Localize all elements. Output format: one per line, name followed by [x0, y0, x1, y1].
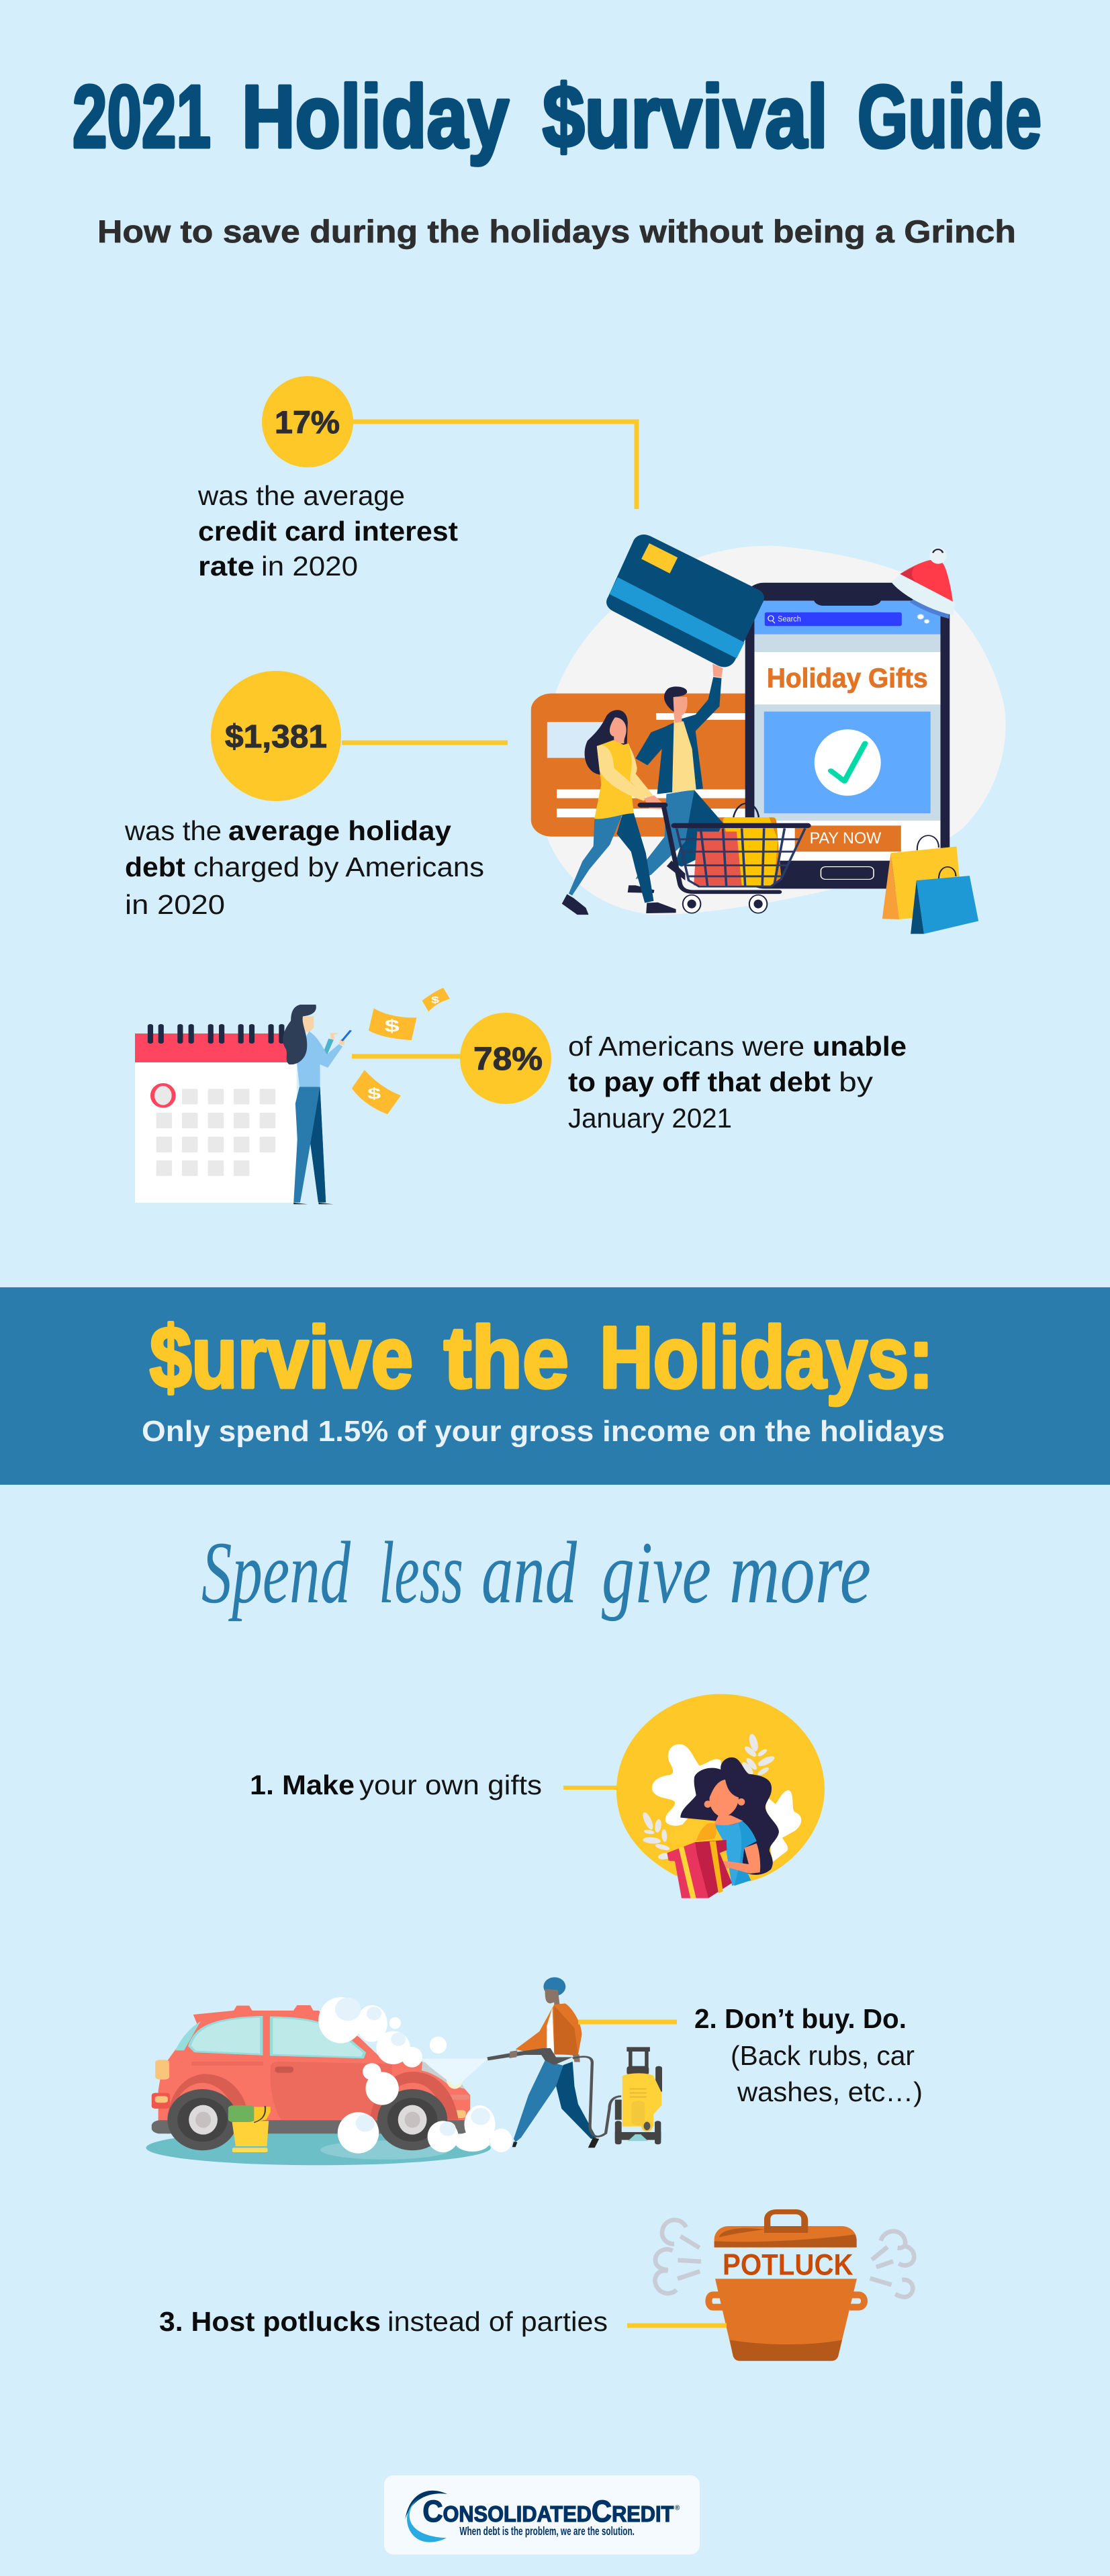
logo panel: [384, 2475, 700, 2555]
tip 1 text: your own gifts: [359, 1769, 542, 1800]
connector: calendar to 78%: [352, 1054, 463, 1058]
stat: 17% badge: [262, 376, 353, 467]
background blob: [537, 546, 1006, 915]
stat: $1,381 badge: [211, 671, 341, 801]
woman with phone: [283, 1005, 351, 1204]
phone: Search: [778, 614, 801, 623]
phone: PAY NOW: [810, 829, 881, 847]
pressure washer: [615, 2047, 662, 2144]
foam bubbles: [318, 1997, 512, 2154]
tip 3 text: instead of parties: [387, 2306, 608, 2337]
flying dollar bills: $: [367, 1086, 381, 1103]
subtitle: How to save during the holidays without being a Grinch: [97, 214, 1016, 249]
bucket: [228, 2105, 271, 2152]
face: [709, 1780, 739, 1817]
tip 2 text: washes, etc…): [737, 2076, 923, 2107]
logo swoosh: [405, 2491, 447, 2542]
stat: 78% badge: [460, 1013, 551, 1104]
banner heading: the: [444, 1308, 569, 1406]
connector: tip 1: [563, 1786, 618, 1790]
banner: survive the holidays: [0, 1287, 1110, 1485]
section heading: spend less and give more: less: [379, 1523, 463, 1622]
connector: tip 3: [627, 2324, 727, 2328]
title: Holiday: [242, 67, 509, 166]
section heading: spend less and give more: and: [481, 1523, 577, 1622]
hair: [680, 1757, 779, 1875]
calendar: [135, 1024, 297, 1203]
text: 78% unable to pay off debt: unable: [813, 1031, 907, 1062]
car: [152, 2005, 473, 2150]
text: credit card interest rate: in 2020: [261, 551, 358, 582]
flying dollar bills: $: [385, 1017, 400, 1036]
santa hat: [892, 547, 955, 618]
tip 2 text: (Back rubs, car: [731, 2040, 915, 2071]
banner heading: [150, 1308, 933, 1406]
text: credit card interest rate: was the average: [197, 480, 405, 511]
steam: [655, 2220, 914, 2297]
tip 1 text: [250, 1769, 542, 1800]
text: credit card interest rate: credit card interest: [198, 516, 458, 547]
tip 2 text: [694, 2003, 923, 2107]
banner heading: $urvive: [150, 1308, 413, 1406]
text: average holiday debt: debt: [125, 852, 185, 882]
woman: [562, 710, 676, 915]
stat: 78% badge: 78%: [473, 1042, 543, 1077]
leaves: [641, 1733, 776, 1860]
shopping cart: [641, 803, 808, 913]
gift box: [667, 1821, 732, 1898]
man with pressure washer: [487, 1977, 621, 2148]
text: 78% unable to pay off debt: by: [839, 1066, 874, 1097]
illustration: calendar, woman and flying money: [135, 988, 450, 1204]
arm: [719, 1843, 760, 1874]
handles: [708, 2295, 723, 2307]
title: $urvival: [543, 67, 828, 166]
logo registered mark: ®: [675, 2504, 680, 2512]
tip 3 text: [159, 2306, 608, 2337]
text: 78% unable to pay off debt: [568, 1031, 907, 1134]
illustration: potluck pot: [655, 2209, 914, 2361]
tip 3 text: 3. Host potlucks: [159, 2306, 381, 2337]
connector: 17% to card: [353, 422, 637, 509]
tip 1 text: 1. Make: [250, 1769, 355, 1800]
label: POTLUCK: [723, 2248, 853, 2281]
banner subtext: Only spend 1.5% of your gross income on the holidays: [142, 1415, 945, 1448]
shirt: [714, 1821, 757, 1886]
text: 78% unable to pay off debt: January 2021: [568, 1103, 732, 1134]
spray: [422, 2059, 488, 2086]
text: average holiday debt: was the: [124, 815, 222, 846]
section heading: spend less and give more: give: [602, 1523, 711, 1622]
text: 78% unable to pay off debt: to pay off that debt: [568, 1066, 831, 1097]
connector: tip 2: [578, 2020, 677, 2024]
tip 2 text: 2. Don’t buy. Do.: [694, 2003, 907, 2034]
text: average holiday debt: average holiday: [228, 815, 451, 846]
section heading: spend less and give more: [201, 1523, 871, 1622]
shopping bags: [882, 835, 978, 934]
text: 78% unable to pay off debt: of Americans were: [568, 1031, 804, 1062]
phone: [745, 583, 950, 888]
illustration: car wash: [146, 1977, 662, 2165]
banner heading: Holidays:: [600, 1308, 933, 1406]
ground: [146, 2130, 491, 2165]
pot body: [715, 2279, 857, 2361]
text: average holiday debt: charged by Americans: [193, 852, 484, 882]
lid: [764, 2209, 808, 2233]
title: Guide: [858, 67, 1042, 166]
logo wordmark: CONSOLIDATEDCREDIT: [422, 2494, 674, 2528]
blue credit card: [606, 535, 764, 667]
man: [628, 664, 723, 893]
flying dollar bills: $: [431, 995, 439, 1005]
text: average holiday debt: in 2020: [125, 889, 225, 920]
title: [73, 67, 1042, 166]
logo tagline: When debt is the problem, we are the solution.: [459, 2524, 635, 2538]
stat: $1,381 badge: $1,381: [225, 719, 327, 755]
phone: Holiday Gifts: [767, 662, 928, 693]
flying dollar bills: [352, 988, 450, 1114]
white blobs: [652, 1744, 801, 1862]
connector: $1,381 to illustration: [342, 740, 508, 745]
text: average holiday debt: [124, 815, 484, 920]
orange credit card: [531, 694, 768, 837]
stat: 17% badge: 17%: [275, 404, 340, 440]
illustration: woman holding gift: [616, 1694, 825, 1898]
illustration: shopping couple, credit cards and phone: [531, 535, 1006, 934]
section heading: spend less and give more: Spend: [201, 1523, 351, 1622]
title: 2021: [73, 67, 211, 166]
text: credit card interest rate: [197, 480, 458, 582]
section heading: spend less and give more: more: [729, 1523, 871, 1622]
text: credit card interest rate: rate: [198, 551, 255, 582]
yellow circle: [616, 1694, 825, 1882]
